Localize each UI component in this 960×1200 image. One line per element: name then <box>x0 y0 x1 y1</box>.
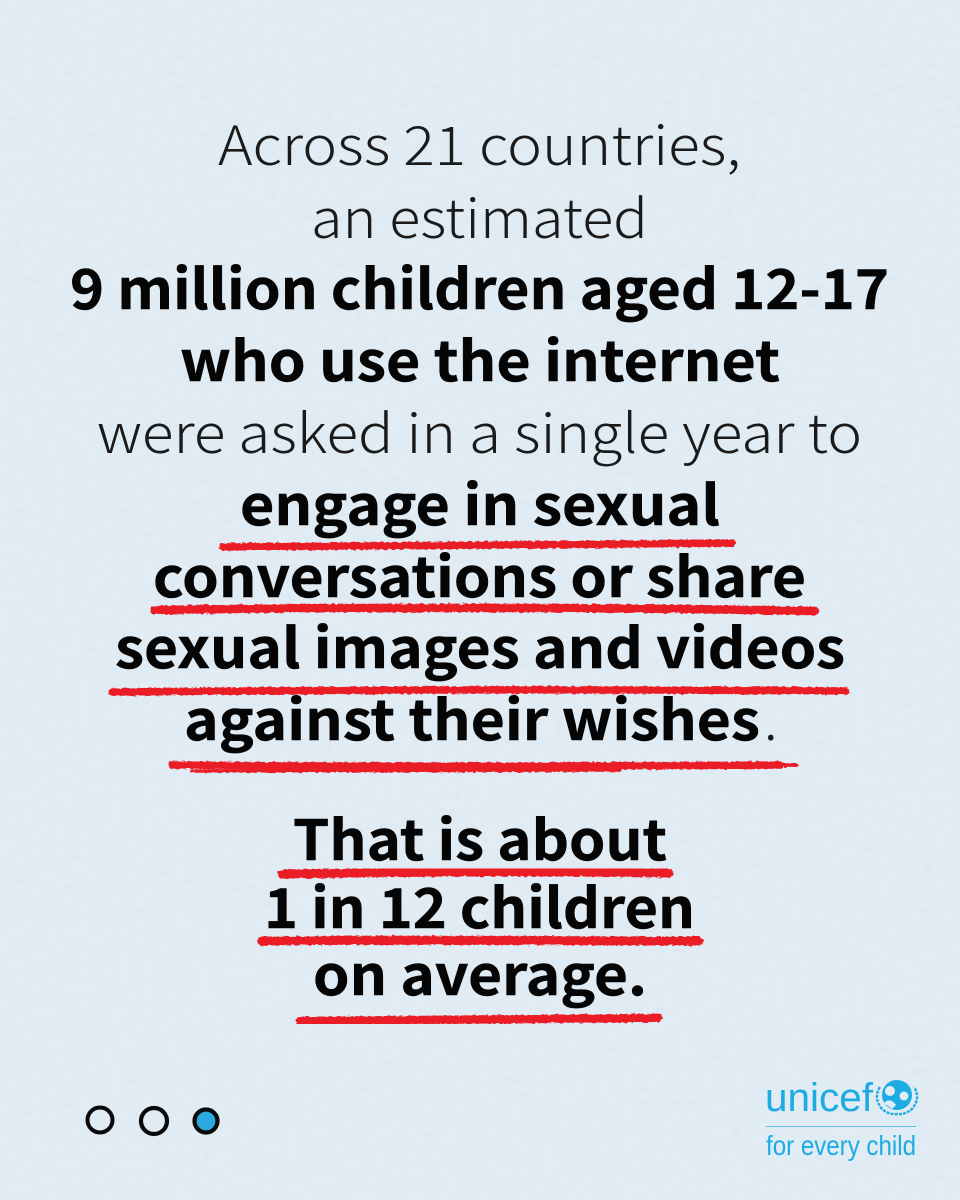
main statement text: conversations or share <box>153 533 806 613</box>
divider <box>766 1126 916 1127</box>
main statement text: against their wishes <box>184 676 760 756</box>
icon: unicef emblem <box>877 1080 917 1114</box>
main statement text: 9 million children aged 12-17 <box>70 245 889 325</box>
main statement text: were asked in a single year to <box>97 390 862 469</box>
closing statistic text: on average. <box>313 931 647 1011</box>
closing statistic text <box>264 796 695 1011</box>
wordmark: unicef <box>765 1076 874 1120</box>
closing statistic text: That is about <box>293 796 667 876</box>
main statement text: . <box>764 677 778 756</box>
tagline: for every child <box>766 1130 916 1161</box>
red underlines for the statement <box>112 543 846 771</box>
main statement text: an estimated <box>311 175 648 254</box>
main statement text <box>70 102 889 756</box>
main statement text: sexual images and videos <box>115 604 845 684</box>
closing statistic text: 1 in 12 children <box>264 864 695 944</box>
main statement text: Across 21 countries, <box>218 102 741 181</box>
unicef logo <box>765 1076 917 1161</box>
pagination dots <box>88 1108 218 1134</box>
main statement text: who use the internet <box>180 317 780 397</box>
red underlines for the closing statistic <box>262 872 699 1021</box>
main statement text: engage in sexual <box>240 461 720 541</box>
